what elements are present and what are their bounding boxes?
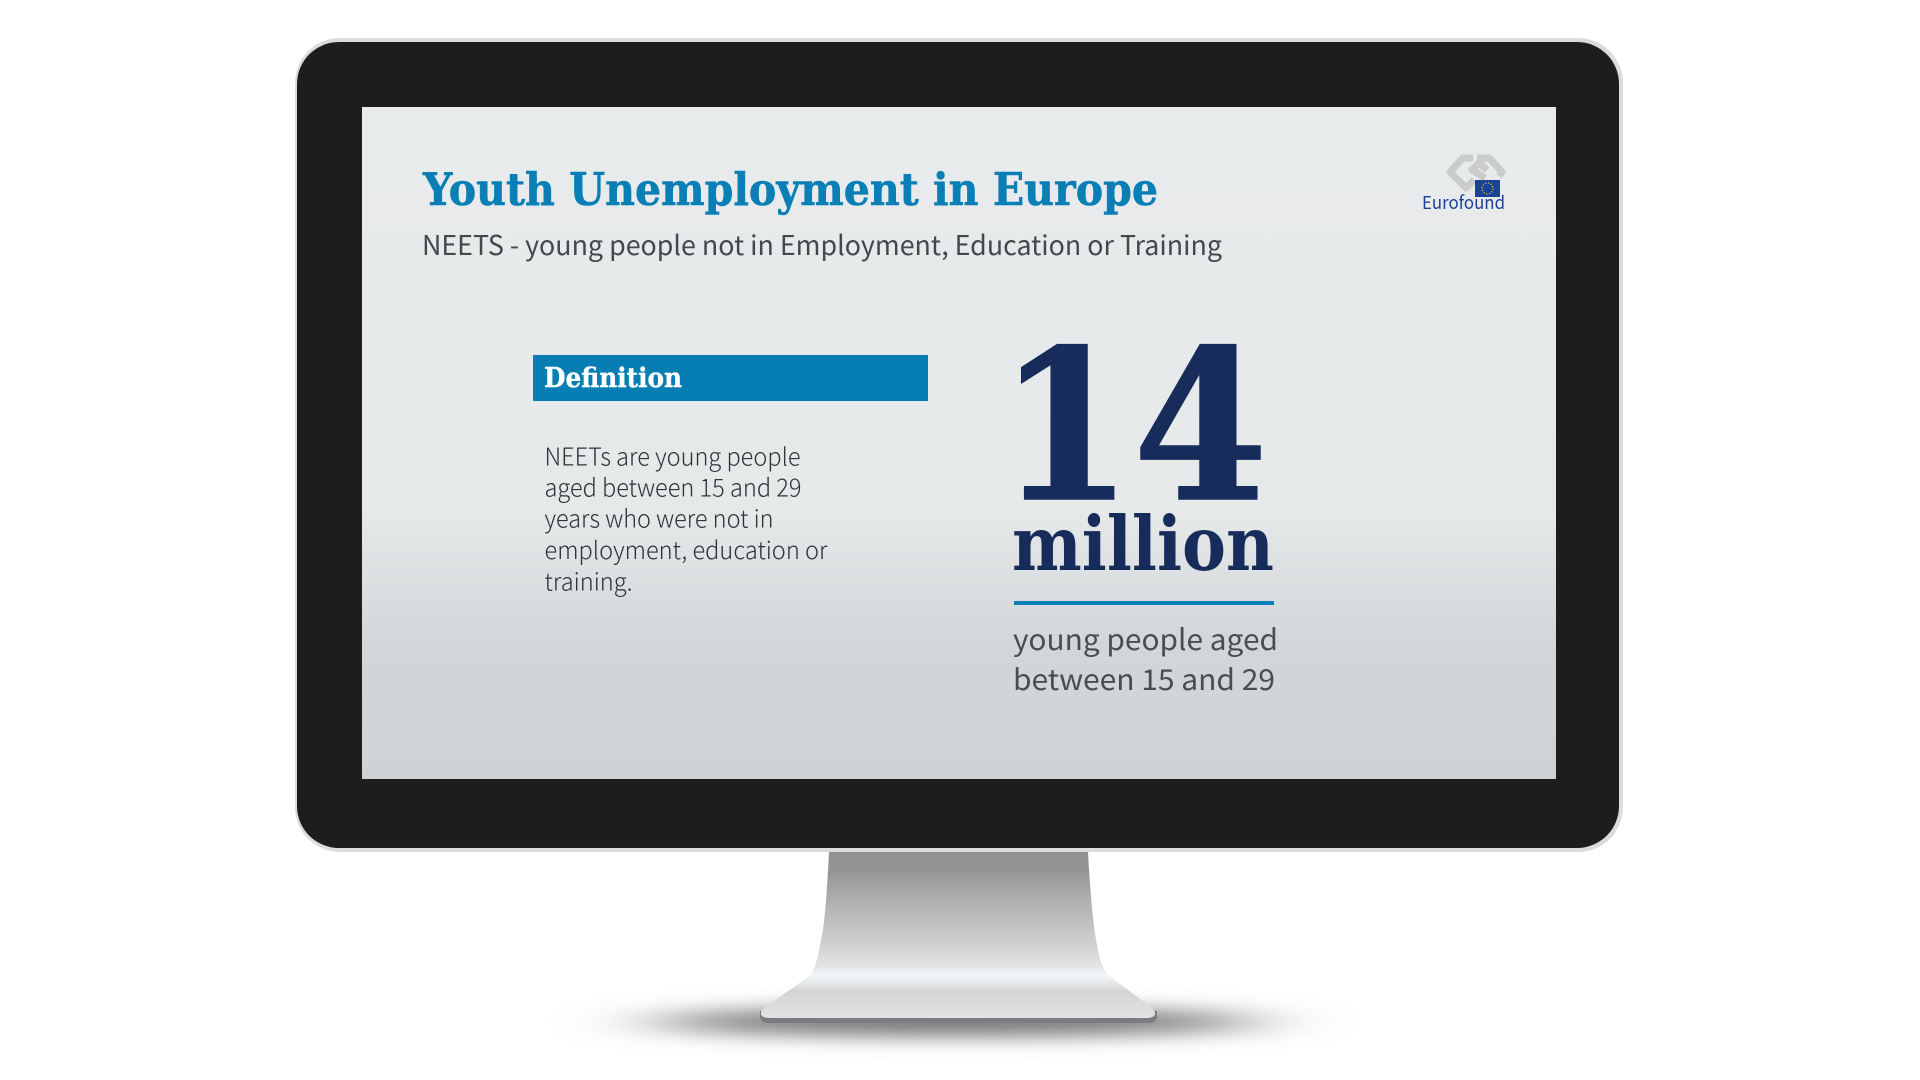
title: Youth Unemployment in Europe [422, 163, 1158, 216]
definition text: aged between 15 and 29 [544, 470, 802, 504]
logo wordmark: Eurofound [1422, 189, 1505, 215]
monitor stand [760, 852, 1157, 1023]
definition text: training. [544, 564, 632, 598]
screen panel [362, 107, 1556, 779]
stand body [761, 852, 1155, 1018]
stand shadow [650, 1008, 1260, 1036]
screen background [362, 107, 1556, 779]
monitor bezel [295, 38, 1623, 852]
definition heading bar [533, 355, 928, 401]
definition text: years who were not in [544, 500, 774, 536]
icon: EU flag [1475, 180, 1500, 197]
definition text [544, 438, 828, 598]
Eurofound logo [1422, 158, 1505, 215]
definition text: employment, education or [544, 532, 828, 567]
stand base lip [760, 1011, 1157, 1023]
statistic caption: between 15 and 29 [1013, 657, 1275, 699]
statistic caption: young people aged [1013, 617, 1278, 659]
icon: linked chain mark [1450, 158, 1502, 188]
definition heading bar: Definition [544, 362, 682, 394]
statistic caption [1013, 617, 1278, 699]
subtitle: NEETS - young people not in Employment, Education or Training [422, 224, 1222, 263]
definition text: NEETs are young people [544, 438, 800, 474]
big statistic: 14 million: million [1012, 500, 1274, 588]
big statistic: 14 million: 14 [998, 305, 1268, 549]
statistic divider [1014, 601, 1274, 605]
